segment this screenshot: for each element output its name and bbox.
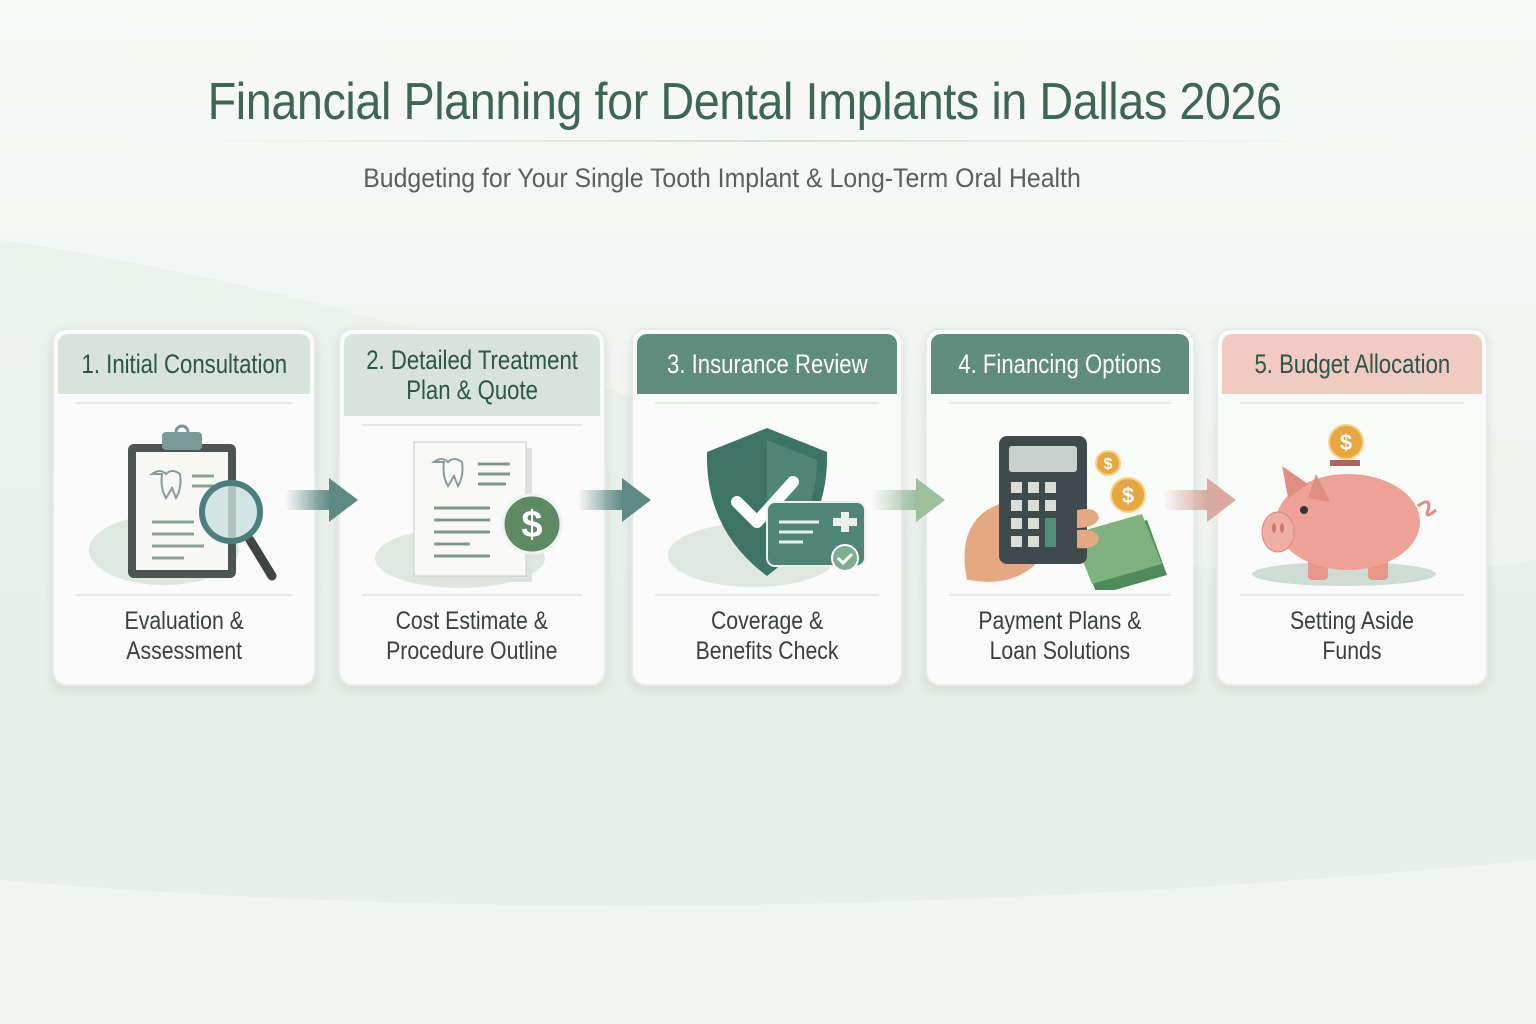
caption: step 2: Procedure Outline (386, 637, 558, 665)
caption: step 1 (124, 607, 244, 665)
title: Financial Planning for Dental Implants in Dallas 2026 (208, 73, 1282, 131)
heading: step 1: 1. Initial Consultation (81, 349, 287, 379)
icon: calculator hand cash: $ (1122, 483, 1134, 508)
heading: step 5 (1222, 334, 1482, 394)
heading: step 3 (637, 334, 897, 394)
heading: step 3: 3. Insurance Review (667, 349, 867, 379)
panel: step 4 (925, 328, 1195, 686)
arrow 1 (288, 478, 358, 522)
caption: step 4: Loan Solutions (990, 637, 1130, 665)
heading: step 2: Plan & Quote (406, 375, 538, 405)
arrow 4 (1167, 478, 1236, 522)
caption: step 1: Evaluation & (124, 607, 244, 635)
heading: step 4 (931, 334, 1189, 394)
panel: step 3 (631, 328, 903, 686)
subtitle: Budgeting for Your Single Tooth Implant & Long-Term Oral Health (363, 163, 1081, 193)
panel: step 1 (52, 328, 316, 686)
icon: calculator hand cash (964, 436, 1167, 590)
caption: step 3: Benefits Check (696, 637, 838, 665)
icon: quote document with dollar (375, 442, 562, 588)
caption: step 4: Payment Plans & (978, 607, 1141, 635)
heading: step 5: 5. Budget Allocation (1254, 349, 1450, 379)
caption: step 3: Coverage & (711, 607, 823, 635)
caption: step 2 (386, 607, 558, 665)
panel: step 5 (1216, 328, 1488, 686)
caption: step 1: Assessment (126, 637, 242, 665)
heading: step 2 (344, 334, 600, 416)
caption: step 3 (696, 607, 838, 665)
icon: shield and insurance card (668, 428, 866, 587)
icon: clipboard with magnifier (89, 424, 276, 585)
caption: step 2: Cost Estimate & (396, 607, 548, 635)
caption: step 5: Funds (1322, 637, 1382, 665)
arrow 2 (580, 478, 651, 522)
icon: piggy bank (1252, 424, 1437, 586)
heading: step 2: 2. Detailed Treatment (366, 345, 578, 375)
icon: piggy bank: $ (1340, 430, 1352, 455)
caption: step 5 (1290, 607, 1414, 665)
icon: quote document with dollar: $ (521, 504, 543, 546)
caption: step 5: Setting Aside (1290, 607, 1414, 635)
heading: step 1 (58, 334, 310, 394)
icon: calculator hand cash: $ (1104, 456, 1113, 473)
caption: step 4 (978, 607, 1142, 665)
arrow 3 (876, 478, 945, 522)
heading: step 4: 4. Financing Options (958, 349, 1162, 379)
panel: step 2 (338, 328, 606, 686)
